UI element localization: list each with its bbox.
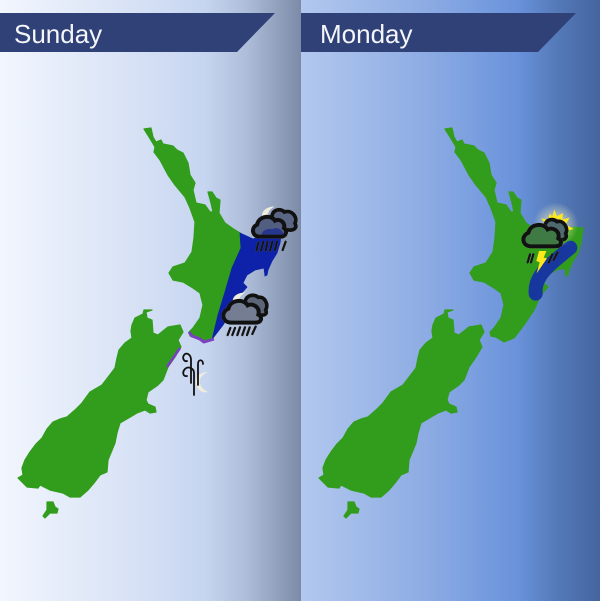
Sunday heading banner: [0, 13, 275, 52]
icon: front cloud: [523, 225, 561, 246]
Monday background: [301, 0, 600, 601]
map: South Island, Monday: [319, 310, 484, 518]
map: North Island, Monday: [445, 128, 583, 342]
map: North Island, Sunday: [144, 128, 282, 342]
icon: lightning bolt: [536, 251, 547, 273]
wind warning coast: [189, 332, 214, 342]
panel: Sunday: [0, 0, 301, 601]
Monday heading banner: [301, 13, 576, 52]
icons: thunderstorm warning area: [523, 202, 578, 294]
map: South Island, Sunday: [18, 310, 183, 518]
Sunday background: [0, 0, 301, 601]
Sunday heading banner: Sunday: [14, 19, 102, 49]
icon: heavy rain with moon, East Cape: [253, 207, 296, 251]
panel: Monday: [301, 0, 600, 601]
icon: back cloud: [545, 220, 567, 240]
icon: wind with moon: [183, 354, 208, 395]
Monday heading banner: Monday: [320, 19, 412, 49]
warning area: [536, 248, 570, 294]
rain warning area: [212, 227, 282, 340]
icon: rain drops: [528, 252, 558, 263]
icon: heavy rain with moon, Hawke's Bay: [223, 293, 267, 335]
icon: sun: [533, 202, 578, 248]
